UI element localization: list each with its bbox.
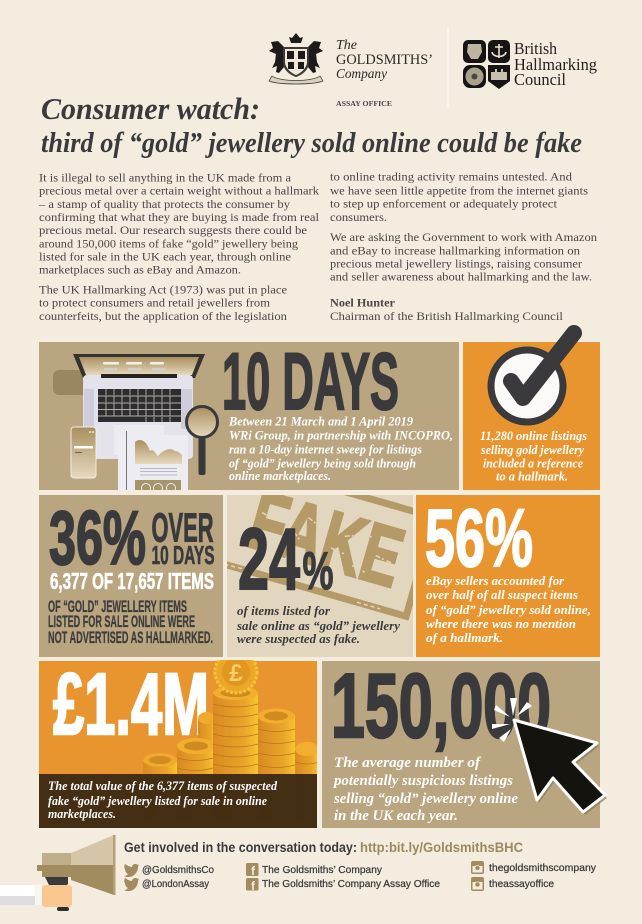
text block: sweep description: online marketplaces. bbox=[229, 469, 331, 483]
icon: fake stamp bbox=[227, 495, 413, 621]
title: Consumer watch: bbox=[41, 92, 260, 126]
icon: facebook square: f bbox=[251, 879, 256, 893]
caption band: The total value of the 6,377 items of suspected bbox=[48, 779, 278, 793]
logo wordmark bbox=[336, 38, 433, 108]
text block: suspected as fake: were suspected as fake. bbox=[237, 632, 360, 646]
icon: facebook square: f bbox=[251, 864, 256, 878]
text block: 11,280 listings: to a hallmark. bbox=[496, 470, 568, 484]
text block: not advertised as hallmarked: NOT ADVERTISED AS HALLMARKED. bbox=[48, 629, 213, 647]
text block: intro left column: The UK Hallmarking Act (1973) was put in place bbox=[39, 283, 287, 296]
social: twitter bbox=[124, 864, 214, 891]
text block: eBay sellers: of “gold” jewellery sold online, bbox=[426, 603, 591, 617]
text block: intro right column: and seller awareness about hallmarking and the law. bbox=[330, 271, 592, 284]
icon: facebook square bbox=[246, 878, 258, 893]
text block: 11,280 listings bbox=[480, 429, 587, 484]
icon: fake stamp: FAKE bbox=[239, 473, 413, 605]
text block: eBay sellers: of a hallmark. bbox=[426, 631, 503, 645]
panel: 150,000 listings bbox=[322, 656, 607, 828]
text block: suspected as fake: of items listed for bbox=[237, 604, 330, 618]
social: twitter: @LondonAssay bbox=[142, 878, 210, 890]
text block: 11,280 listings: included a reference bbox=[483, 456, 583, 470]
icon: facebook square bbox=[246, 863, 258, 878]
text block: intro left column bbox=[38, 172, 319, 323]
logo wordmark: Company bbox=[336, 67, 388, 82]
logo wordmark bbox=[514, 39, 597, 89]
text block: eBay sellers: over half of all suspect items bbox=[426, 588, 578, 602]
icon: four hallmark symbols bbox=[463, 40, 510, 89]
text block: suspected as fake bbox=[236, 604, 400, 646]
statistic: 36% over 10 days: 36% bbox=[49, 496, 146, 581]
text block: intro left column: confirming that what they are buying is made from real bbox=[39, 211, 319, 224]
text block: intro right column: Noel Hunter bbox=[330, 297, 395, 310]
text block: intro right column: to online trading activity remains untested. And bbox=[330, 171, 572, 184]
text block: average number of listings: in the UK each year. bbox=[334, 808, 458, 824]
social: facebook: The Goldsmiths’ Company Assay Office bbox=[262, 878, 440, 890]
logo wordmark: British bbox=[514, 39, 557, 58]
link: campaign url: http:bit.ly/GoldsmithsBHC bbox=[360, 840, 523, 855]
social: instagram: thegoldsmithscompany bbox=[489, 862, 597, 874]
panel: hallmark reference bbox=[463, 333, 600, 490]
caption band: fake “gold” jewellery listed for sale in online bbox=[48, 794, 267, 808]
social: facebook: The Goldsmiths’ Company bbox=[262, 864, 383, 876]
text block: intro left column: precious metal over a certain weight without a hallmark bbox=[39, 185, 319, 198]
panel: 24 percent fake bbox=[227, 495, 413, 657]
text block: intro right column: to step up enforcement or adequately protect bbox=[330, 198, 558, 211]
social: twitter: @GoldsmithsCo bbox=[142, 864, 214, 876]
logo wordmark: Council bbox=[514, 70, 566, 89]
text block: average number of listings: potentially suspicious listings bbox=[332, 773, 513, 789]
panel: 10 days bbox=[39, 337, 459, 492]
text block: intro right column: Chairman of the British Hallmarking Council bbox=[330, 310, 563, 323]
title bbox=[41, 92, 582, 159]
text block: not advertised as hallmarked bbox=[48, 598, 213, 647]
icon: check mark bbox=[491, 333, 574, 422]
logo wordmark: GOLDSMITHS’ bbox=[336, 52, 433, 68]
text block: sweep description: of “gold” jewellery being sold through bbox=[229, 456, 416, 470]
icon: instagram camera bbox=[471, 861, 484, 874]
text block: average number of listings: selling “gold” jewellery online bbox=[333, 791, 519, 807]
heading: 10 days: 10 DAYS bbox=[222, 337, 399, 427]
text block: sweep description: WRi Group, in partnership with INCOPRO, bbox=[229, 428, 453, 442]
text block: intro left column: counterfeits, but the application of the legislation bbox=[39, 310, 287, 323]
text block: intro left column: It is illegal to sell anything in the UK made from a bbox=[39, 172, 291, 184]
social: facebook bbox=[246, 863, 440, 893]
icon: twitter bird bbox=[124, 864, 139, 877]
panel: 36 percent bbox=[39, 495, 223, 657]
icon: mouse cursor with click sparks bbox=[492, 698, 607, 815]
panel: 56 percent bbox=[416, 493, 600, 657]
text block: not advertised as hallmarked: LISTED FOR SALE ONLINE WERE bbox=[48, 613, 195, 631]
text block: 11,280 listings: 11,280 online listings bbox=[480, 429, 587, 443]
text block: intro left column: precious metal. Our research suggests there could be bbox=[39, 224, 307, 237]
panel: 1.4 million bbox=[39, 651, 319, 828]
text block: intro left column: listed for sale in the UK each year, through online bbox=[39, 250, 291, 263]
caption band bbox=[39, 774, 317, 828]
text block: intro right column: We are asking the Government to work with Amazon bbox=[330, 231, 597, 244]
text block: average number of listings bbox=[332, 755, 519, 824]
statistic: £1.4M: £1.4M bbox=[53, 656, 209, 753]
statistic: 36% over 10 days: OVER bbox=[152, 504, 214, 550]
icon: twitter bird bbox=[124, 878, 139, 891]
icon: laptop, phone, document and magnifier bbox=[53, 354, 218, 492]
text block: intro left column: to protect consumers and retail jewellers from bbox=[39, 297, 270, 310]
icon: stacks of gold coins: £ bbox=[229, 660, 243, 687]
text block: not advertised as hallmarked: OF “GOLD” JEWELLERY ITEMS bbox=[48, 598, 187, 616]
text block: eBay sellers bbox=[426, 574, 591, 645]
statistic: 36% over 10 days: 10 DAYS bbox=[152, 540, 214, 570]
heading: get involved: Get involved in the conversation today: bbox=[124, 840, 357, 855]
text block: sweep description bbox=[228, 415, 453, 483]
statistic: 56%: 56% bbox=[425, 493, 533, 584]
logo: British Hallmarking Council bbox=[463, 39, 597, 89]
text block: average number of listings: The average number of bbox=[334, 755, 482, 771]
caption band: marketplaces. bbox=[48, 807, 116, 821]
text block: intro right column: consumers. bbox=[330, 211, 387, 224]
text block: suspected as fake: sale online as “gold” jewellery bbox=[236, 619, 400, 633]
statistic: 6,377 of 17,657 items: 6,377 OF 17,657 ITEMS bbox=[50, 568, 214, 594]
social: instagram bbox=[471, 861, 597, 891]
text block: intro left column: marketplaces such as eBay and Amazon. bbox=[39, 264, 241, 277]
text block: eBay sellers: where there was no mention bbox=[426, 617, 576, 631]
statistic: 24%: 24 bbox=[238, 511, 300, 608]
text block: intro right column: and eBay to increase hallmarking information on bbox=[330, 244, 580, 257]
logo wordmark: ASSAY OFFICE bbox=[336, 100, 392, 108]
social: instagram: theassayoffice bbox=[489, 878, 554, 890]
logo wordmark: The bbox=[336, 38, 357, 53]
title: third of “gold” jewellery sold online could be fake bbox=[41, 127, 582, 159]
icon: coat of arms crest bbox=[269, 33, 323, 84]
text block: sweep description: Between 21 March and 1 April 2019 bbox=[228, 415, 414, 429]
logo wordmark: Hallmarking bbox=[514, 55, 597, 74]
text block: intro right column: we have seen little appetite from the internet giants bbox=[330, 184, 589, 197]
text block: eBay sellers: eBay sellers accounted for bbox=[426, 574, 564, 588]
logo: The Goldsmiths' Company bbox=[269, 33, 433, 108]
icon: stacks of gold coins bbox=[143, 660, 317, 774]
text block: intro right column: precious metal jewellery listings, raising consumer bbox=[330, 257, 582, 270]
text block: intro right column bbox=[330, 171, 597, 323]
text block: 11,280 listings: selling gold jewellery bbox=[480, 443, 584, 457]
text block: sweep description: ran a 10-day internet sweep for listings bbox=[229, 442, 422, 456]
text block: intro left column: around 150,000 items of fake “gold” jewellery being bbox=[39, 237, 298, 250]
text block: intro left column: – a stamp of quality that protects the consumer by bbox=[38, 198, 290, 211]
icon: instagram camera bbox=[471, 877, 484, 891]
icon: megaphone held in hand bbox=[0, 835, 116, 911]
statistic: 24%: % bbox=[302, 542, 334, 601]
